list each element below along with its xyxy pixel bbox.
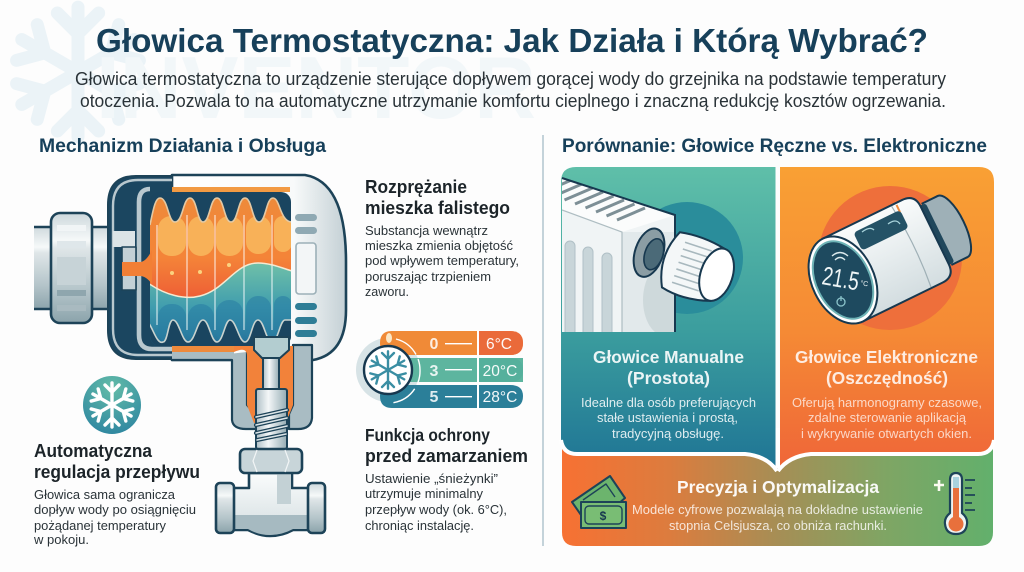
row: setting 0: 6°C	[486, 336, 512, 353]
text block: frost protection: Ustawienie „śnieżynki”	[365, 471, 498, 486]
pipe and coupling nut	[34, 213, 110, 323]
intro text: otoczenia. Pozwala to na automatyczne utrzymanie komfortu cieplnego i znaczną redukcję kosztów ogrzewania.	[80, 91, 946, 111]
row: setting 5: 28°C	[483, 389, 517, 406]
panel: manual heads: (Prostota)	[627, 368, 710, 388]
panel: electronic heads: i wykrywanie otwartych okien.	[801, 426, 972, 441]
text block: automatic flow regulation: w pokoju.	[33, 532, 89, 547]
title: Głowica Termostatyczna: Jak Działa i Którą Wybrać?	[96, 23, 928, 60]
text block: bellows expansion: pod wpływem temperatury,	[365, 253, 519, 268]
panel: manual heads: Idealne dla osób preferujących	[581, 395, 756, 410]
orange piston connector	[122, 250, 152, 284]
panel: manual heads: tradycyjną obsługę.	[612, 426, 724, 441]
panel: precision and optimisation	[562, 428, 993, 546]
icon: banknotes: $	[600, 509, 607, 523]
text block: bellows expansion: mieszka zmienia objętość	[365, 238, 513, 253]
shell buttons	[295, 214, 317, 337]
text block: frost protection: utrzymuje minimalny	[365, 486, 483, 501]
heading: mechanism: Mechanizm Działania i Obsługa	[39, 135, 326, 157]
text block: automatic flow regulation: Głowica sama ogranicza	[34, 487, 176, 502]
row: setting 3: 20°C	[483, 363, 517, 380]
text block: automatic flow regulation: Automatyczna	[34, 441, 153, 461]
text block: automatic flow regulation	[33, 441, 200, 547]
text block: bellows expansion: zaworu.	[365, 284, 409, 299]
bellows chamber	[148, 190, 293, 348]
row: setting 0	[380, 331, 523, 355]
inner chamber wall and connector	[139, 189, 172, 349]
row: setting 5: 5	[430, 389, 439, 406]
text block: frost protection: przepływ wody (ok. 6°C),	[365, 502, 507, 517]
panel: precision and optimisation: Precyzja i Optymalizacja	[677, 477, 879, 497]
row: setting 3: 3	[430, 363, 439, 380]
watermark: snowflake and wordmark	[11, 7, 536, 137]
intro text	[75, 69, 946, 111]
text block: frost protection: przed zamarzaniem	[365, 446, 528, 466]
illustration: electronic thermostat	[795, 180, 984, 335]
panel: electronic heads: Oferują harmonogramy czasowe,	[792, 395, 982, 410]
panel: electronic heads	[778, 167, 994, 471]
navy housing	[108, 176, 172, 359]
text block: frost protection: Funkcja ochrony	[365, 425, 490, 445]
valve stem	[263, 358, 279, 391]
illustration: electronic thermostat: 21.5	[820, 260, 862, 296]
heading: comparison: Porównanie: Głowice Ręczne vs. Elektroniczne	[562, 135, 987, 157]
panel: electronic heads: zdalne sterowanie aplikacją	[808, 410, 967, 425]
panel: precision and optimisation: Modele cyfrowe pozwalają na dokładne ustawienie	[632, 502, 923, 517]
text block: automatic flow regulation: dopływ wody po osiągnięciu	[34, 502, 196, 517]
dial with snowflake	[364, 333, 420, 403]
outer shell	[172, 175, 346, 360]
watermark: snowflake and wordmark: INVENTOR	[96, 38, 536, 137]
valve neck	[172, 352, 256, 429]
text block: automatic flow regulation: pożądanej temperatury	[34, 518, 166, 533]
chart: dial settings to temperature table	[356, 331, 523, 409]
row: setting 0: 0	[430, 336, 439, 353]
text block: bellows expansion: Substancja wewnątrz	[365, 223, 488, 238]
panel: electronic heads: (Oszczędność)	[826, 368, 948, 388]
panel: manual heads: Głowice Manualne	[593, 347, 744, 367]
icon: thermometer	[934, 473, 975, 534]
row: setting 3	[380, 358, 523, 382]
valve body	[232, 473, 309, 536]
illustration: thermostatic head cutaway with valve	[34, 175, 346, 536]
text block: automatic flow regulation: regulacja przepływu	[34, 462, 200, 482]
text block: frost protection	[365, 425, 528, 533]
text block: bellows expansion: mieszka falistego	[365, 198, 510, 218]
thread	[256, 410, 287, 440]
text block: frost protection: chroniąc instalację.	[365, 518, 474, 533]
panel: electronic heads: Głowice Elektroniczne	[795, 347, 978, 367]
text block: bellows expansion: poruszając trzpieniem	[365, 269, 491, 284]
icon: banknotes	[572, 476, 626, 528]
panel: manual heads: stałe ustawienia i prostą,	[597, 410, 738, 425]
row: setting 5	[380, 385, 523, 408]
illustration: radiator and manual knob	[562, 177, 735, 332]
text block: bellows expansion: Rozprężanie	[365, 177, 467, 197]
panel: manual heads	[544, 167, 777, 471]
panel: precision and optimisation: stopnia Celsjusza, co obniża rachunki.	[669, 518, 887, 533]
text block: bellows expansion	[365, 177, 519, 299]
intro text: Głowica termostatyczna to urządzenie sterujące dopływem gorącej wody do grzejnika na podstawie temperatury	[75, 69, 946, 89]
icon: snowflake badge	[83, 376, 141, 434]
illustration: electronic thermostat: °C	[860, 279, 869, 288]
